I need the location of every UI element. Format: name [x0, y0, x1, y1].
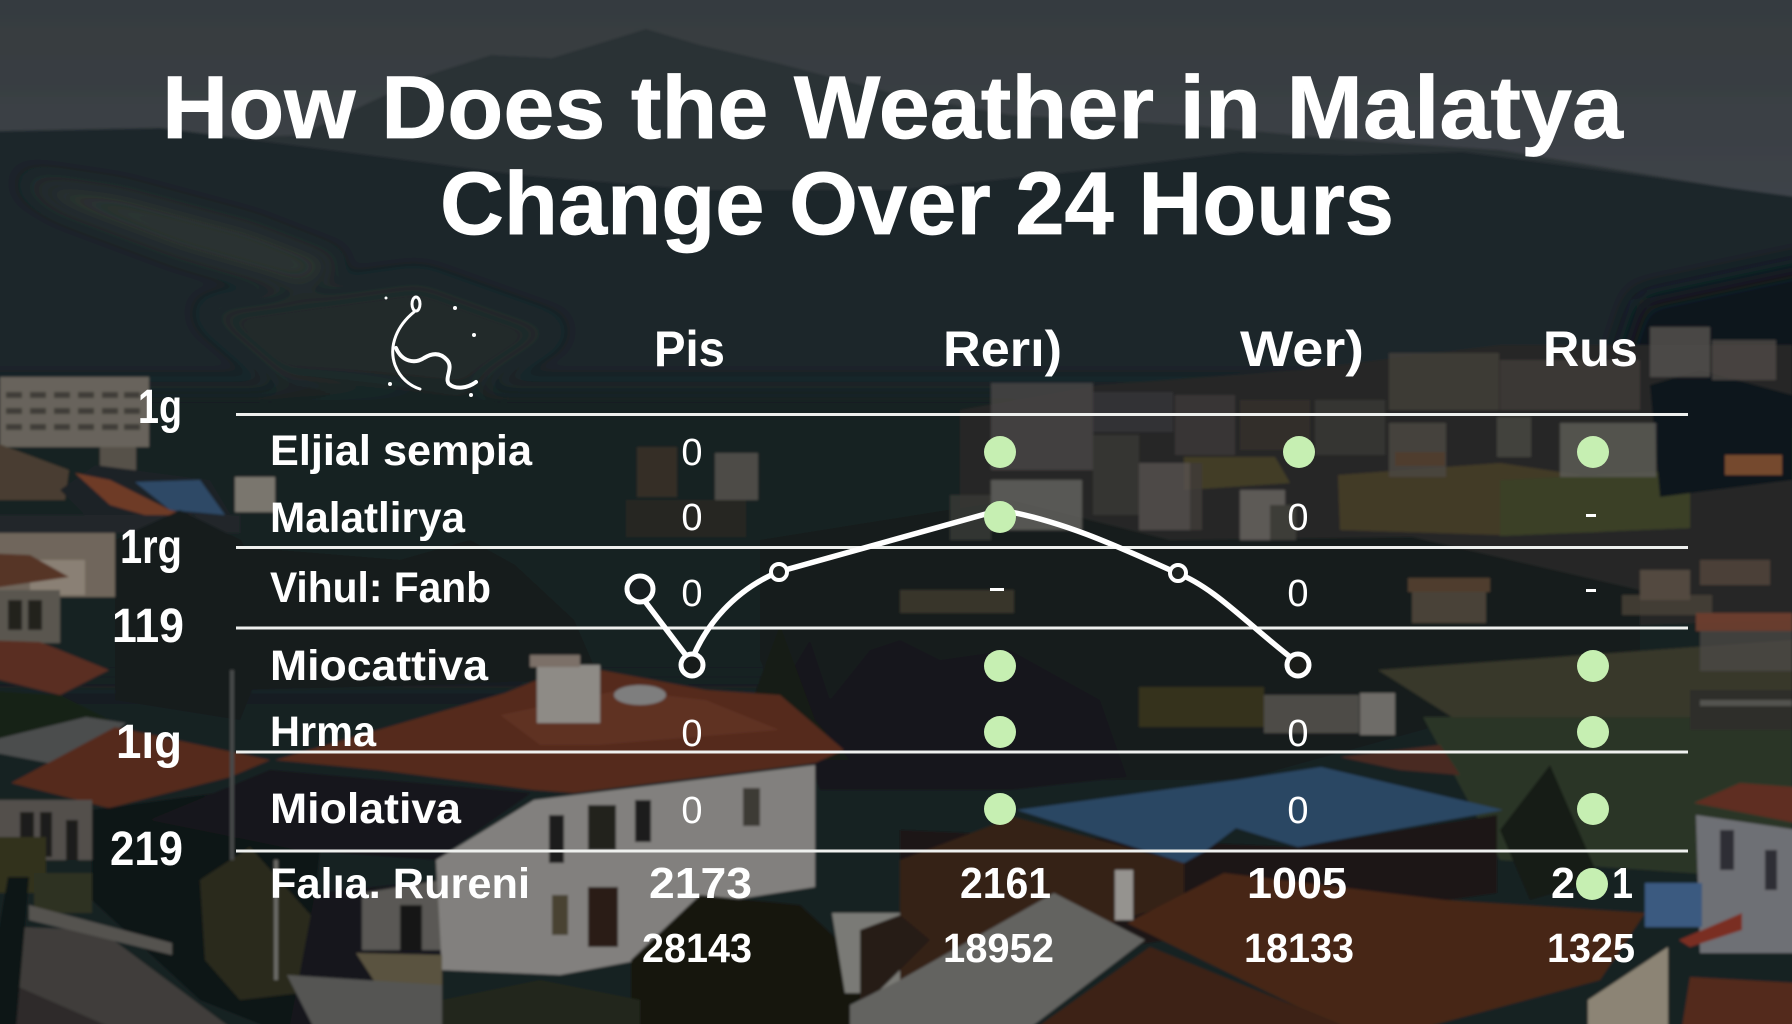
left axis numbers: 119 — [112, 600, 184, 653]
blue roof and building — [900, 815, 1497, 960]
row labels: Hrma — [270, 708, 377, 756]
open markers — [681, 432, 1309, 832]
left axis numbers: 1ıg — [116, 716, 182, 769]
left axis numbers — [110, 381, 184, 876]
open markers: 0 — [1287, 790, 1309, 832]
left axis numbers: 1g — [138, 381, 182, 434]
bottom figures, second row: 18133 — [1244, 925, 1354, 971]
open markers: 0 — [681, 713, 703, 755]
title: How Does the Weather in Malatya — [162, 57, 1625, 157]
bottom figures, first row: 2173 — [649, 859, 752, 908]
open markers: 0 — [681, 573, 703, 615]
title: Change Over 24 Hours — [440, 153, 1394, 253]
table rules — [236, 414, 1688, 851]
green markers — [984, 436, 1609, 825]
row labels: Eljial sempia — [270, 427, 533, 475]
left axis numbers: 1rg — [120, 521, 182, 574]
trees in middle distance — [780, 640, 1127, 790]
bottom figures, first row: 2 — [1551, 859, 1575, 908]
row labels: Falıa. Rureni — [270, 860, 530, 908]
bottom figures, first row: 2161 — [960, 859, 1051, 908]
column headings: Wer) — [1240, 321, 1364, 377]
column headings: Rus — [1543, 321, 1638, 377]
column headings: Rerı) — [943, 321, 1062, 377]
row labels: Miolativa — [270, 785, 462, 833]
bottom-right house — [1696, 815, 1792, 953]
row labels: Malatlirya — [270, 494, 466, 542]
open markers: 0 — [1287, 713, 1309, 755]
left buildings — [0, 377, 149, 447]
small dash markers — [990, 514, 1596, 592]
column headings — [654, 321, 1638, 377]
bottom figures, first row — [649, 859, 1633, 908]
left axis numbers: 219 — [110, 823, 183, 876]
left roofs — [0, 717, 126, 767]
open markers: 0 — [681, 432, 703, 474]
line chart: temperature curve — [627, 501, 1309, 676]
row labels: Miocattiva — [270, 642, 489, 690]
row labels — [270, 427, 533, 908]
bottom figures, second row: 28143 — [642, 925, 752, 971]
row labels: Vihul: Fanb — [270, 564, 491, 612]
open markers: 0 — [681, 790, 703, 832]
main white house — [287, 880, 442, 1024]
bottom figures, first row: 1 — [1612, 859, 1633, 908]
column headings: Pis — [654, 321, 725, 377]
bottom figures, first row: 1005 — [1247, 859, 1347, 908]
bottom figures, second row: 18952 — [943, 925, 1054, 971]
town buildings — [626, 327, 1792, 735]
open markers: 0 — [681, 497, 703, 539]
bottom figures, second row — [642, 925, 1635, 971]
bottom figures, second row: 1325 — [1547, 925, 1635, 971]
town hillside — [960, 345, 1792, 640]
icon: abstract weather squiggle — [384, 296, 476, 397]
title — [162, 57, 1625, 253]
foreground roofs — [850, 893, 1145, 1024]
open markers: 0 — [1287, 497, 1309, 539]
open markers: 0 — [1287, 573, 1309, 615]
